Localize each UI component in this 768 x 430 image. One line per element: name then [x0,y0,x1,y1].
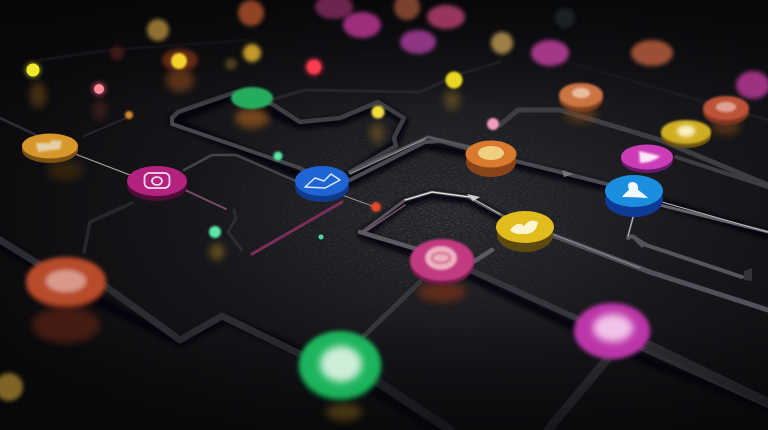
node: blue folder [295,166,349,202]
node: yellow heart [496,211,554,252]
node: orange small top [559,83,603,112]
node: magenta instagram [127,166,187,201]
node: orange face [466,140,516,177]
node: magenta large inner glow [593,314,633,342]
reflections below nodes [30,68,740,421]
highlighted bright traces [70,139,768,268]
circuit lines: shadow layer [0,95,768,430]
node: magenta heart [621,144,673,173]
node: orange folder, top left [22,134,78,163]
node: green top [231,87,273,109]
glow dots [25,49,499,240]
node: red-orange blurred left [26,257,106,309]
arrow markers on traces [467,170,752,281]
node: pink circle [410,239,474,285]
node: magenta large lower right [574,303,650,359]
node: yellow small right [661,120,711,148]
node: green large [298,331,382,401]
node: blue person [605,175,663,217]
node: red-orange small right [703,96,749,125]
background: scratch texture [246,116,605,322]
node: green large inner glow [320,346,362,382]
